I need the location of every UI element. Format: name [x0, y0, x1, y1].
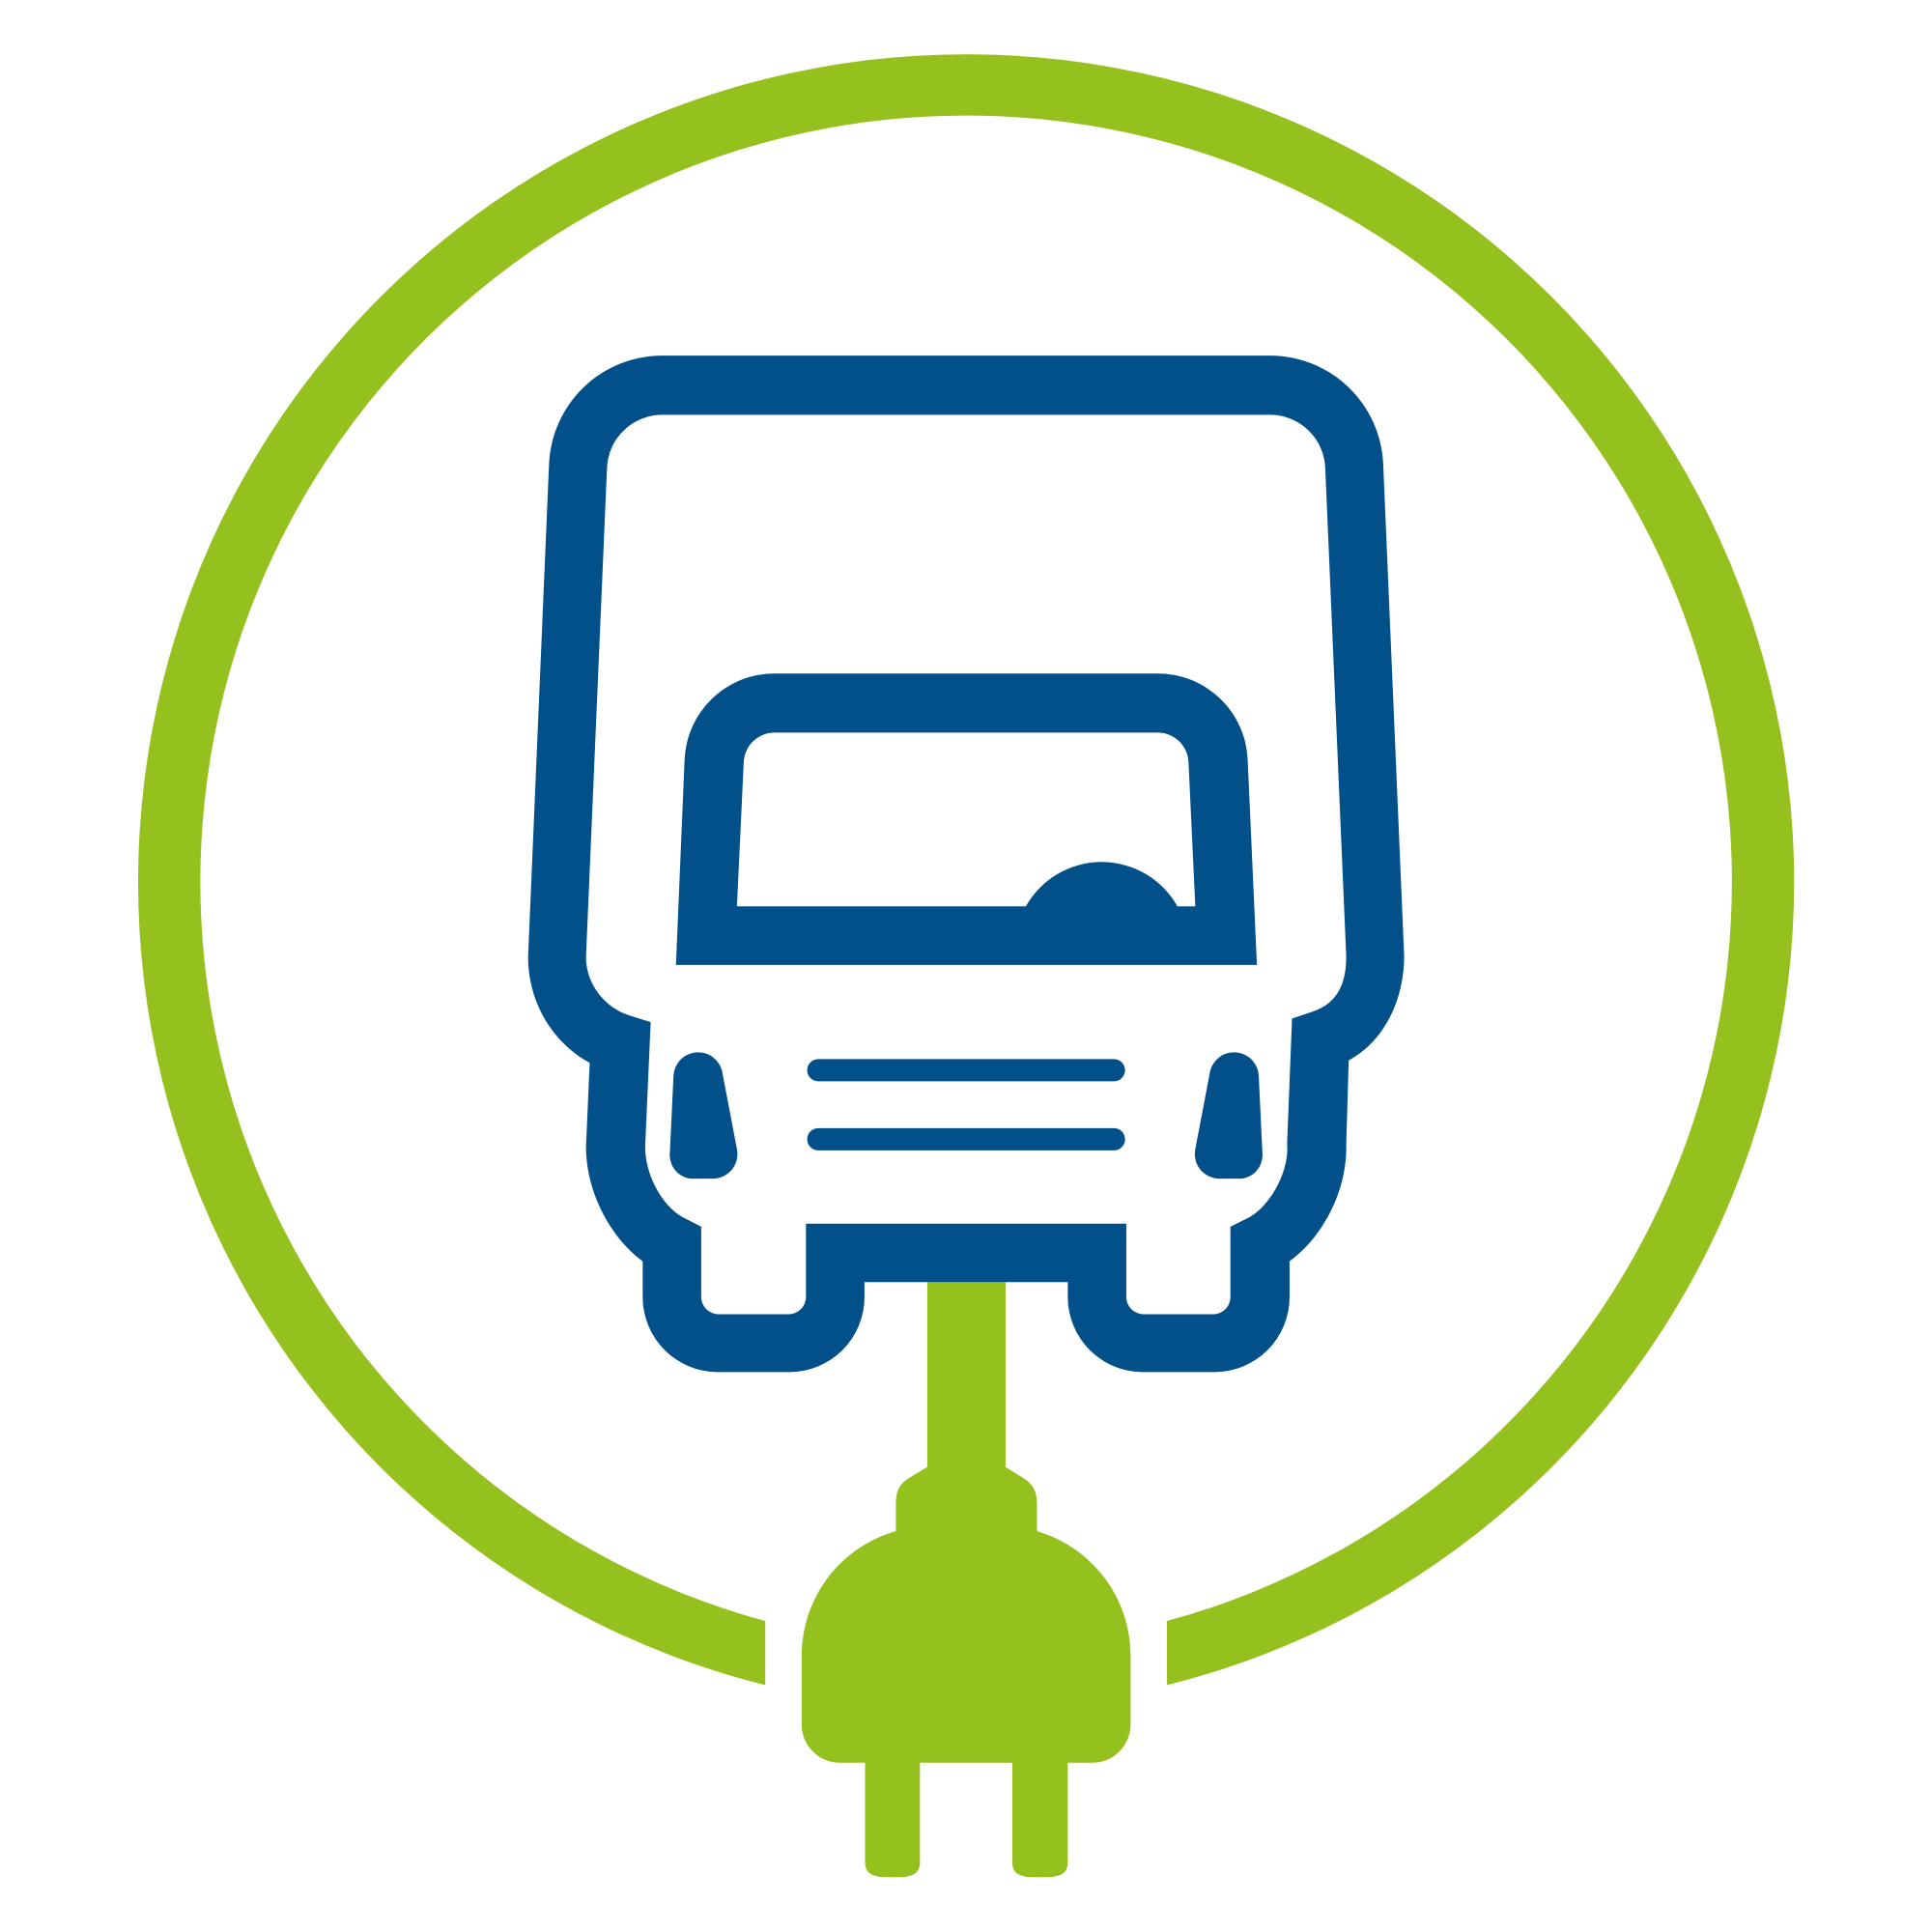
truck body outline	[528, 355, 1405, 1372]
grille upper bar	[808, 1059, 1125, 1081]
left headlight	[669, 1052, 737, 1179]
grille lower bar	[808, 1128, 1125, 1151]
right headlight	[1195, 1052, 1263, 1179]
ring: open green circle	[138, 54, 1794, 1685]
windshield with driver	[676, 673, 1257, 965]
cable and plug	[802, 1282, 1130, 1877]
